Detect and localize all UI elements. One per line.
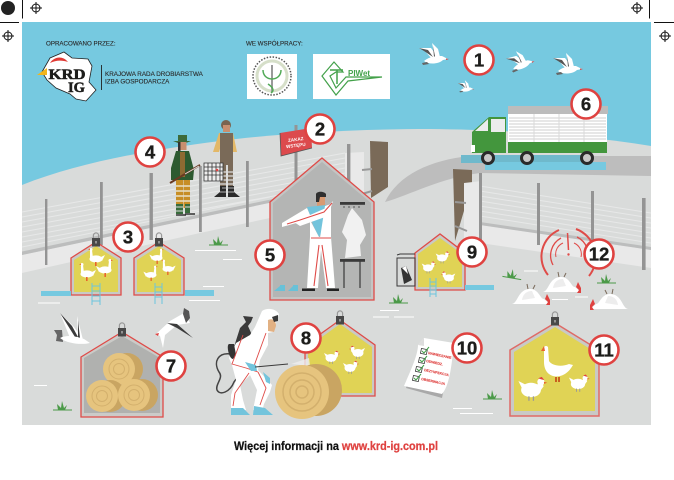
alarm signal <box>541 229 596 276</box>
house 5: changing room <box>270 158 374 300</box>
birds near 1 <box>419 43 583 92</box>
marker 8: 8 <box>301 328 311 348</box>
gate: road <box>453 169 482 241</box>
left fence <box>22 153 345 273</box>
dead birds <box>512 272 628 310</box>
marker 3 <box>114 222 142 252</box>
checklist <box>404 338 454 398</box>
water pools and ladders by houses 3 <box>41 283 214 305</box>
house 3a: geese <box>71 233 121 295</box>
shower head <box>340 202 365 208</box>
marker 12 <box>584 240 614 268</box>
warning sign <box>280 128 312 156</box>
marker 1: 1 <box>474 50 484 70</box>
checklist: NAWIEDZANIE <box>428 351 453 360</box>
marker 3: 3 <box>123 226 133 248</box>
marker 4 <box>136 138 164 166</box>
gate: centre <box>345 141 388 201</box>
logo: PIWet: PIWet <box>348 69 370 78</box>
logo and heading: KRD-IG: KRD <box>48 67 86 83</box>
suit <box>229 309 279 412</box>
road <box>385 156 651 202</box>
logo and heading: KRD-IG: IZBA GOSPODARCZA <box>105 78 170 86</box>
background sky <box>22 22 651 425</box>
bench <box>340 259 365 288</box>
grass tufts <box>53 236 616 410</box>
footer link line: Więcej informacji na www.krd-ig.com.pl <box>234 439 438 453</box>
blue shoe covers <box>274 285 298 291</box>
marker 9: 9 <box>467 242 477 262</box>
marker 2: 2 <box>315 118 325 140</box>
marker 12: 12 <box>589 244 609 264</box>
backpack sprayer <box>233 316 253 350</box>
protective suit on hanger <box>342 208 366 258</box>
white goose <box>541 346 573 382</box>
blue gloves and boots <box>245 362 270 384</box>
logo: veterinary inspection <box>247 54 297 99</box>
house 8 with hens <box>305 311 375 396</box>
house 9 with hens <box>415 234 494 297</box>
warning sign: ZAKAZ <box>288 136 304 143</box>
marker 11: 11 <box>594 340 614 360</box>
large hay bale <box>275 364 342 419</box>
house 7 with hay <box>81 323 163 417</box>
marker 6 <box>572 90 600 118</box>
checklist: DEZYNFEKCJA <box>424 368 450 377</box>
hose <box>216 354 246 393</box>
bird right <box>156 313 190 348</box>
marker 11 <box>590 336 618 364</box>
logo and heading: KRD-IG: OPRACOWANO PRZEZ: <box>46 40 116 48</box>
white ground dashes <box>34 250 588 414</box>
marker 5 <box>256 240 284 270</box>
logo and heading: KRD-IG: KRAJOWA RADA DROBIARSTWA <box>105 71 204 78</box>
marker 7 <box>156 352 186 380</box>
number markers <box>114 46 618 380</box>
marker 6: 6 <box>581 94 591 114</box>
hunter figure <box>170 135 200 215</box>
marker 2 <box>306 114 334 144</box>
marker 9 <box>458 238 486 266</box>
marker 7: 7 <box>166 356 176 376</box>
worker spraying <box>216 309 310 415</box>
house 3b: geese <box>134 233 184 295</box>
background ground <box>22 129 651 425</box>
marker 10 <box>452 334 482 362</box>
fence posts <box>45 125 646 270</box>
warning sign: WSTĘPU <box>286 142 307 149</box>
checklist: ODWIEDZ. <box>426 359 443 367</box>
marker 10: 10 <box>457 338 477 358</box>
spray wand <box>255 364 288 367</box>
house 11: goose and hens <box>510 312 599 416</box>
truck <box>461 106 608 170</box>
printer crop marks <box>0 0 674 42</box>
marker 8 <box>292 324 320 352</box>
farmer figure with cage <box>204 120 240 197</box>
checklist: OBSERWACJA <box>421 377 446 386</box>
marker 4: 4 <box>145 142 156 162</box>
right fence <box>480 186 651 268</box>
marker 5: 5 <box>265 244 275 266</box>
logo and heading: KRD-IG: IG <box>68 80 85 96</box>
person dressing in suit <box>282 192 339 291</box>
logo and heading: KRD-IG <box>37 40 204 101</box>
marker 1 <box>464 46 494 74</box>
hay bales <box>86 353 158 412</box>
heading: partners: WE WSPÓŁPRACY: <box>246 40 303 48</box>
dead-bird bin <box>397 254 415 286</box>
birds near 7 <box>54 308 193 348</box>
logo: PIWet <box>313 54 390 99</box>
bird left <box>54 330 63 342</box>
